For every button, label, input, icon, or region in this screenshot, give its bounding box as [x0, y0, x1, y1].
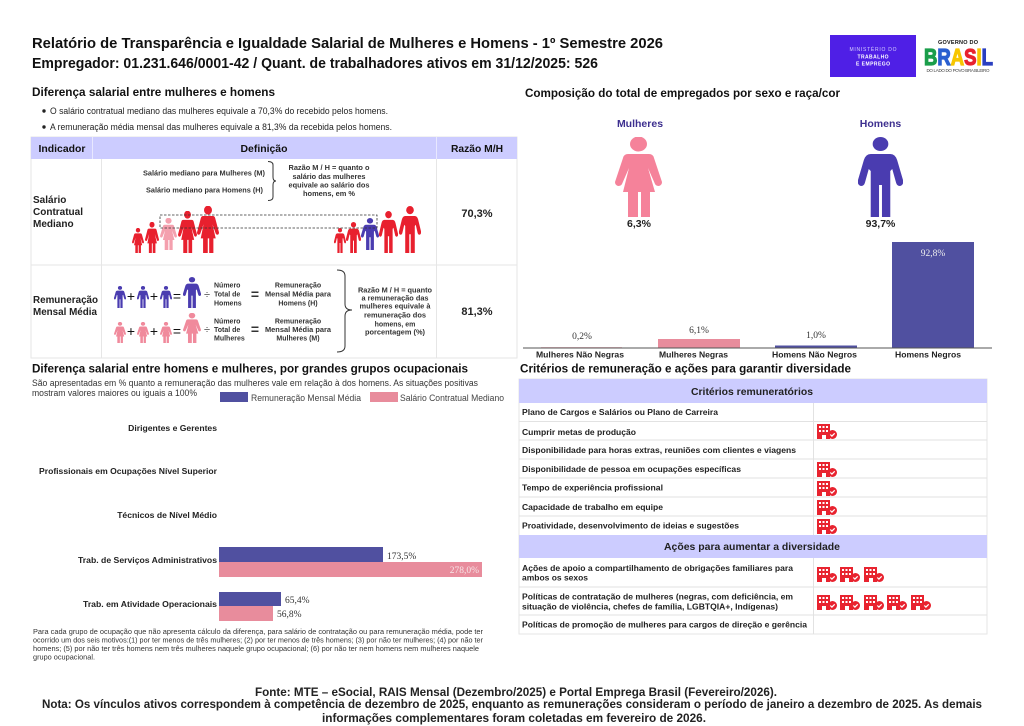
- bar chart: grupos ocupacionais: Trab. de Serviços Administrativos: [78, 555, 217, 565]
- definition text: razão remuneração: homens, em: [375, 322, 415, 328]
- formula: mulheres: =: [173, 323, 181, 339]
- row label: remuneração mensal média: Remuneração: [33, 295, 98, 306]
- actions list: Políticas de promoção de mulheres para cargos de direção e gerência: [522, 620, 807, 630]
- footer note: informações complementares foram coletadas em fevereiro de 2026.: [322, 713, 706, 725]
- row label: remuneração mensal média: [33, 295, 98, 318]
- formula: mulheres: Remuneração: [275, 318, 321, 326]
- criteria list: Disponibilidade de pessoa em ocupações específicas: [522, 464, 741, 474]
- logo: Ministério do Trabalho e Emprego: E EMPREGO: [856, 62, 890, 68]
- bar chart: grupos ocupacionais: [39, 423, 482, 621]
- heading: diferença por grupos ocupacionais: Diferença salarial entre homens e mulheres, por grandes grupos ocupacionais: [32, 364, 468, 376]
- table header: Definição: [240, 143, 288, 155]
- section header: ações: Ações para aumentar a diversidade: [664, 541, 840, 553]
- definition text: razão remuneração: mulheres equivale à: [360, 304, 431, 310]
- actions icons: [817, 567, 931, 610]
- formula: mulheres: +: [127, 323, 135, 339]
- definition text: salário mediano: salário das mulheres: [292, 174, 366, 181]
- table header: [31, 137, 517, 159]
- table header: Indicador: [38, 143, 86, 155]
- formula: mulheres: Mulheres (M): [276, 336, 320, 342]
- title: Empregador: 01.231.646/0001-42 / Quant. de trabalhadores ativos em 31/12/2025: 526: [32, 56, 598, 72]
- key findings bullets: A remuneração média mensal das mulheres equivale a 81,3% da recebida pelos homens.: [50, 122, 392, 132]
- bar chart: grupos ocupacionais: Técnicos de Nível Médio: [117, 510, 217, 520]
- formula: mulheres: Total de: [214, 327, 240, 334]
- criteria list: Proatividade, desenvolvimento de ideias e sugestões: [522, 520, 739, 530]
- icon: mulheres 6,3%: [615, 118, 663, 230]
- criteria list: Disponibilidade para horas extras, reuniões com clientes e viagens: [522, 445, 796, 455]
- formula: mulheres: +: [150, 323, 158, 339]
- definition text: salário mediano: [143, 162, 370, 200]
- panel: indicator table: [31, 137, 517, 358]
- definition text: razão remuneração: porcentagem (%): [365, 330, 425, 336]
- logo: Governo do Brasil: BRASIL: [924, 44, 993, 70]
- criteria icons: [817, 424, 837, 534]
- actions list: Políticas de contratação de mulheres (negras, com deficiência, em: [522, 592, 793, 602]
- definition text: salário mediano: homens, em %: [303, 191, 356, 198]
- formula: homens: Mensal Média para: [265, 292, 331, 298]
- icon: mulheres 6,3%: 6,3%: [627, 218, 652, 230]
- section header: critérios remuneratórios: [519, 379, 987, 403]
- definition text: salário mediano: Salário mediano para Homens (H): [146, 188, 263, 194]
- logo: Ministério do Trabalho e Emprego: TRABALHO: [858, 54, 889, 60]
- bar chart: composição por raça/cor: Homens Não Negros: [772, 350, 857, 360]
- bar chart: composição por raça/cor: Homens Negros: [895, 350, 961, 360]
- icon: mulheres 6,3%: Mulheres: [617, 118, 663, 130]
- actions list: [522, 563, 807, 630]
- actions list: Ações de apoio a compartilhamento de obrigações familiares para: [522, 563, 793, 573]
- actions list: situação de violência, chefes de família, LGBTQIA+, Indígenas): [522, 602, 778, 612]
- bar chart: composição por raça/cor: 0,2%: [572, 332, 592, 342]
- footnote: Para cada grupo de ocupação que não apresenta cálculo da diferença, para salário de contratação ou para remuneração média, pode ter: [33, 627, 483, 636]
- bar chart: composição por raça/cor: 92,8%: [921, 249, 945, 259]
- formula: homens: =: [173, 288, 181, 304]
- section header: ações: [519, 535, 987, 558]
- criteria list: [522, 407, 796, 530]
- icon: homens 93,7%: Homens: [860, 118, 901, 130]
- key findings bullets: O salário contratual mediano das mulheres equivale a 70,3% do recebido pelos homens.: [50, 106, 388, 116]
- formula: mulheres: Mulheres: [214, 336, 245, 342]
- formula: homens: Número: [214, 282, 240, 290]
- logo: Governo do Brasil: GOVERNO DO: [938, 40, 979, 46]
- row label: salário contratual mediano: Mediano: [33, 219, 74, 230]
- chart description: [32, 378, 479, 398]
- chart description: mostram valores maiores ou iguais a 100%: [32, 388, 197, 398]
- footnote: homens; (5) por não ter três homens nem três mulheres naquele grupo ocupacional; (6) por não ter nem homens nem mulheres naquele: [33, 644, 479, 653]
- heading: composição: Composição do total de empregados por sexo e raça/cor: [525, 88, 841, 100]
- chart description: São apresentadas em % quanto a remuneração das mulheres vale em relação à dos homens. As situações positivas: [32, 378, 479, 388]
- chart legend: [220, 392, 504, 403]
- row label: salário contratual mediano: Salário: [33, 195, 66, 206]
- definition text: salário mediano: Salário mediano para Mulheres (M): [143, 170, 265, 178]
- definition text: salário mediano: equivale ao salário dos: [288, 182, 370, 190]
- definition text: salário mediano: Razão M / H = quanto o: [288, 165, 370, 172]
- criteria list: Tempo de experiência profissional: [522, 482, 663, 492]
- footnote: grupo ocupacional.: [33, 652, 95, 662]
- definition text: razão remuneração: remuneração dos: [364, 312, 426, 320]
- footer note: Nota: Os vínculos ativos correspondem à competência de dezembro de 2025, enquanto as remunerações consideram o período de janeiro a dezembro de 2025. As demais: [42, 699, 982, 711]
- formula: mulheres: Número: [214, 318, 240, 326]
- logo: Ministério do Trabalho e Emprego: [830, 35, 916, 77]
- actions list: ambos os sexos: [522, 572, 588, 582]
- value: 70,3%: 70,3%: [461, 208, 493, 220]
- row label: salário contratual mediano: Contratual: [33, 207, 83, 218]
- icon: homens 93,7%: [858, 118, 903, 230]
- formula: homens: =: [251, 286, 259, 302]
- bar chart: grupos ocupacionais: 278,0%: [450, 566, 479, 576]
- bar chart: composição por raça/cor: 1,0%: [806, 331, 826, 341]
- footer note: [42, 687, 982, 725]
- table header: Razão M/H: [451, 143, 503, 155]
- key findings bullets: [42, 106, 392, 132]
- bar chart: composição por raça/cor: [523, 242, 992, 360]
- bar chart: composição por raça/cor: 6,1%: [689, 326, 709, 336]
- section header: critérios remuneratórios: Critérios remuneratórios: [691, 386, 813, 398]
- chart legend: Salário Contratual Mediano: [400, 393, 504, 403]
- logo: Ministério do Trabalho e Emprego: MINISTÉRIO DO: [850, 46, 897, 53]
- definition text: razão remuneração: a remuneração das: [362, 296, 429, 302]
- formula: mulheres: [114, 313, 331, 343]
- row label: salário contratual mediano: [33, 195, 83, 230]
- heading: diferença salarial: Diferença salarial entre mulheres e homens: [32, 87, 275, 99]
- definition text: razão remuneração: Razão M / H = quanto: [358, 288, 432, 294]
- formula: mulheres: Mensal Média para: [265, 327, 331, 334]
- icon group: homens ordenados por salário: [334, 206, 421, 253]
- chart legend: Remuneração Mensal Média: [251, 393, 361, 403]
- footer note: Fonte: MTE – eSocial, RAIS Mensal (Dezembro/2025) e Portal Emprega Brasil (Fevereiro/2026).: [255, 687, 777, 699]
- formula: mulheres: =: [251, 321, 259, 337]
- bar chart: grupos ocupacionais: Dirigentes e Gerentes: [128, 423, 217, 433]
- title: Relatório de Transparência e Igualdade Salarial de Mulheres e Homens - 1º Semestre 2026: [32, 36, 663, 52]
- title: [32, 36, 663, 72]
- bar chart: composição por raça/cor: Mulheres Não Negras: [536, 350, 624, 360]
- formula: homens: Homens: [214, 300, 242, 308]
- heading: critérios: Critérios de remuneração e ações para garantir diversidade: [520, 364, 851, 376]
- bar chart: grupos ocupacionais: 56,8%: [277, 610, 302, 620]
- criteria list: Plano de Cargos e Salários ou Plano de Carreira: [522, 407, 718, 417]
- formula: homens: Remuneração: [275, 282, 321, 290]
- formula: homens: Homens (H): [278, 300, 318, 308]
- formula: homens: +: [127, 288, 135, 304]
- bar chart: composição por raça/cor: Mulheres Negras: [659, 350, 728, 360]
- row label: remuneração mensal média: Mensal Média: [33, 307, 97, 318]
- icon group: mulheres ordenadas por salário: [132, 206, 219, 253]
- definition text: razão remuneração: [337, 270, 432, 352]
- formula: homens: [114, 277, 331, 308]
- panel: critérios table: [519, 379, 987, 634]
- footnote: [33, 627, 483, 662]
- logo: Governo do Brasil: DO LADO DO POVO BRASILEIRO: [926, 68, 990, 73]
- formula: homens: ÷: [204, 289, 210, 301]
- bar chart: grupos ocupacionais: Profissionais em Ocupações Nível Superior: [39, 466, 218, 476]
- formula: homens: Total de: [214, 292, 240, 298]
- bar chart: grupos ocupacionais: 173,5%: [387, 552, 416, 562]
- value: 81,3%: 81,3%: [461, 306, 493, 318]
- bar chart: grupos ocupacionais: Trab. em Atividade Operacionais: [83, 599, 217, 609]
- formula: homens: +: [150, 288, 158, 304]
- criteria list: Cumprir metas de produção: [522, 427, 636, 437]
- criteria list: Capacidade de trabalho em equipe: [522, 502, 663, 512]
- icon: homens 93,7%: 93,7%: [866, 218, 896, 230]
- bar chart: grupos ocupacionais: 65,4%: [285, 596, 310, 606]
- footnote: ocorrido um dos seis motivos:(1) por ter menos de três mulheres; (2) por ter menos de três homens; (3) por não ter mulheres; (4) por não ter: [33, 636, 483, 644]
- formula: mulheres: ÷: [204, 324, 210, 336]
